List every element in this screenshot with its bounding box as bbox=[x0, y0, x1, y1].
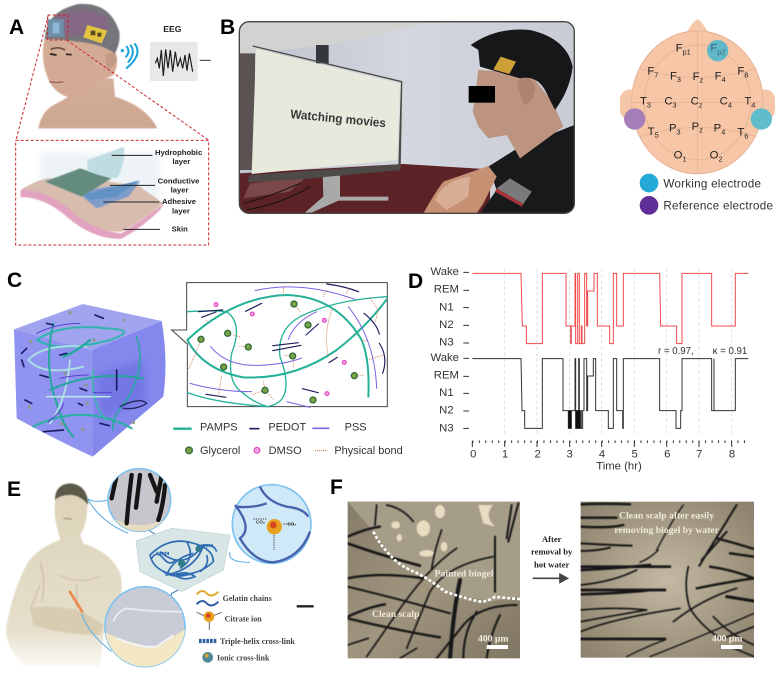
magnifier: citrate ion bbox=[232, 485, 311, 563]
legend: working electrode bbox=[640, 174, 761, 192]
electrode labels: C bbox=[720, 96, 728, 108]
legend: reference electrode: Reference electrode bbox=[663, 199, 773, 212]
electrode labels bbox=[640, 43, 755, 163]
EEG trace box bbox=[150, 42, 211, 81]
x axis title: Time (hr) bbox=[596, 460, 642, 472]
head diagram bbox=[620, 19, 775, 174]
micrograph: painted biogel: Clean scalp bbox=[372, 609, 419, 620]
panel label A: A bbox=[9, 16, 24, 39]
electrode labels: T bbox=[640, 96, 647, 108]
magnified inset bbox=[172, 283, 387, 407]
removal caption bbox=[531, 534, 573, 569]
monitor stand bbox=[304, 173, 388, 213]
subject hair bbox=[471, 29, 573, 110]
y axis labels: upper: N3 bbox=[439, 336, 454, 348]
magnifier: skin interface bbox=[103, 587, 187, 668]
human figure bbox=[6, 483, 122, 667]
electrode labels: 6 bbox=[744, 131, 748, 140]
physical bonds bbox=[187, 286, 383, 399]
electrode labels: F bbox=[670, 70, 677, 82]
black hypnogram bbox=[472, 359, 748, 428]
x axis ticks bbox=[472, 441, 732, 447]
legend: citrate ion bbox=[197, 611, 262, 630]
legend: gelatin chains bbox=[197, 591, 272, 605]
electrode labels: 1 bbox=[682, 154, 687, 163]
electrode labels: O bbox=[710, 150, 718, 162]
layered biogel inset: Conductive bbox=[158, 177, 199, 186]
electrode labels: O bbox=[674, 150, 682, 162]
y axis labels: lower: Wake bbox=[430, 352, 459, 364]
electrode labels: 8 bbox=[744, 70, 748, 79]
electrode labels: p1 bbox=[683, 47, 691, 56]
y axis labels: lower: N2 bbox=[439, 405, 454, 417]
removal caption: removal by bbox=[531, 546, 573, 556]
x axis labels: 1 bbox=[502, 449, 508, 461]
electrode labels: P bbox=[714, 123, 721, 135]
legend: reference electrode bbox=[640, 196, 773, 215]
screen text: Watching movies bbox=[290, 107, 387, 130]
y axis labels: upper bbox=[430, 266, 459, 348]
electrode labels: P bbox=[692, 121, 699, 133]
layered biogel inset: Adhesive bbox=[162, 197, 196, 206]
x axis labels: 6 bbox=[664, 449, 670, 461]
y axis labels: upper: REM bbox=[434, 284, 459, 296]
legend: polymers: PEDOT bbox=[268, 421, 306, 433]
legend: gelatin chains: Gelatin chains bbox=[223, 594, 272, 603]
cube illustration bbox=[14, 304, 165, 457]
legend: molecules and bond: Glycerol bbox=[200, 445, 240, 457]
DMSO molecules bbox=[214, 303, 346, 396]
room background bbox=[239, 22, 574, 213]
y axis labels: upper: N2 bbox=[439, 319, 454, 331]
panel E: biogel on body bbox=[6, 469, 314, 668]
legend: polymers bbox=[173, 421, 367, 433]
zoom callout lines bbox=[16, 15, 208, 140]
y axis labels: lower bbox=[430, 352, 459, 434]
hydrophobic layer bbox=[87, 147, 124, 178]
biogel strip on arm bbox=[69, 591, 83, 612]
electrode labels: 5 bbox=[655, 131, 659, 140]
electrode labels: P bbox=[669, 123, 677, 135]
removal caption: hot water bbox=[534, 559, 569, 569]
y axis labels: upper: Wake bbox=[430, 266, 459, 278]
micrograph: clean scalp bbox=[581, 502, 754, 658]
legend: molecules and bond bbox=[186, 445, 403, 457]
icon: wireless signal bbox=[121, 44, 137, 68]
electrode labels: F bbox=[647, 66, 654, 78]
panel label C: C bbox=[7, 269, 22, 292]
electrode labels: 4 bbox=[728, 100, 732, 109]
electrode labels: z bbox=[700, 76, 704, 85]
adhesive layer bbox=[77, 182, 140, 208]
y axis labels: lower: REM bbox=[434, 369, 459, 381]
panel C: hydrogel network bbox=[14, 283, 403, 457]
subject torso bbox=[480, 125, 574, 213]
panel B: electrode map bbox=[620, 19, 775, 215]
y axis labels: upper: N1 bbox=[439, 301, 454, 313]
magnifier: citrate ion: CO₂ bbox=[256, 520, 265, 525]
x axis labels bbox=[470, 449, 735, 461]
electrode labels: 4 bbox=[722, 75, 726, 84]
panel label D: D bbox=[408, 270, 423, 293]
electrode labels: 4 bbox=[721, 127, 725, 136]
arrow bbox=[533, 574, 567, 582]
x axis labels: 4 bbox=[599, 449, 605, 461]
electrode labels: 7 bbox=[654, 70, 658, 79]
electrode labels: z bbox=[699, 100, 703, 109]
electrode labels: F bbox=[737, 66, 744, 78]
x axis labels: 2 bbox=[535, 449, 541, 461]
callout lines bbox=[82, 498, 250, 652]
PSS chains bbox=[190, 287, 377, 407]
correlation note: r = 0.97, bbox=[658, 346, 694, 357]
electrode markers bbox=[624, 40, 772, 130]
micrograph: clean scalp: removing biogel by water bbox=[614, 525, 720, 536]
EEG heading: EEG bbox=[163, 24, 182, 34]
micrograph: painted biogel: 400 μm bbox=[478, 634, 508, 645]
hydrogel block bbox=[136, 528, 230, 592]
x axis labels: 0 bbox=[470, 449, 476, 461]
legend: working electrode: Working electrode bbox=[663, 177, 761, 190]
electrode labels: p2 bbox=[717, 47, 725, 56]
panel label F: F bbox=[330, 476, 343, 499]
monitor bbox=[248, 46, 402, 182]
layered biogel inset: layer bbox=[172, 206, 190, 215]
conductive layer bbox=[45, 168, 112, 197]
electrode labels: C bbox=[691, 96, 699, 108]
electrode labels: 4 bbox=[751, 100, 755, 109]
y axis ticks bbox=[463, 272, 469, 428]
privacy bar bbox=[469, 86, 495, 103]
x axis labels: 3 bbox=[567, 449, 573, 461]
layered biogel inset bbox=[16, 140, 209, 245]
legend: polymers: PAMPS bbox=[200, 421, 238, 433]
panel F: scalp micrographs bbox=[348, 502, 754, 658]
panel label B: B bbox=[220, 16, 235, 39]
subject neck and face bbox=[473, 70, 563, 158]
electrode labels: 3 bbox=[673, 100, 677, 109]
legend: ionic cross-link bbox=[202, 652, 270, 663]
panel D: sleep staging chart bbox=[430, 266, 748, 472]
biogel boundary bbox=[373, 532, 520, 602]
electrode labels: 3 bbox=[677, 127, 681, 136]
electrode labels: F bbox=[676, 43, 683, 55]
PEDOT chains bbox=[198, 284, 385, 397]
red hypnogram bbox=[472, 273, 748, 344]
micrograph: clean scalp: 400 μm bbox=[712, 634, 742, 645]
micrograph: painted biogel: Painted biogel bbox=[435, 569, 494, 580]
electrode labels: F bbox=[693, 71, 700, 83]
electrode labels: C bbox=[664, 96, 673, 108]
electrode labels: F bbox=[715, 70, 722, 82]
scale dash bbox=[297, 603, 314, 610]
y axis labels: lower: N3 bbox=[439, 422, 454, 434]
legend: triple-helix cross-link: Triple-helix cross-link bbox=[220, 637, 295, 646]
legend: citrate ion: Citrate ion bbox=[225, 615, 262, 624]
layered biogel inset: layer bbox=[172, 157, 190, 166]
glycerol molecules bbox=[198, 301, 357, 403]
layered biogel inset: Hydrophobic bbox=[155, 148, 203, 157]
electrode labels: 3 bbox=[677, 75, 681, 84]
micrograph: painted biogel bbox=[348, 502, 520, 658]
PAMPS chains bbox=[187, 295, 387, 407]
y axis labels: lower: N1 bbox=[439, 387, 454, 399]
magnifier: hair follicles bbox=[107, 469, 173, 535]
electrode labels: T bbox=[737, 127, 744, 139]
panel A: wearable EEG biogel bbox=[16, 4, 211, 245]
removal caption: After bbox=[542, 534, 562, 544]
legend: polymers: PSS bbox=[345, 421, 367, 433]
x axis labels: 8 bbox=[729, 449, 735, 461]
legend: molecules and bond: DMSO bbox=[269, 445, 302, 457]
electrode labels: F bbox=[710, 43, 717, 55]
legend: molecules and bond: Physical bond bbox=[334, 445, 403, 457]
skin layer bbox=[21, 183, 163, 239]
panel B: photo of subject watching movies bbox=[239, 22, 574, 213]
electrode labels: 3 bbox=[647, 100, 651, 109]
legend: ionic cross-link: Ionic cross-link bbox=[217, 654, 270, 663]
subject arm bbox=[423, 166, 497, 213]
kappa note: κ = 0.91 bbox=[713, 346, 747, 357]
magnifier: citrate ion: CO₂ bbox=[287, 522, 296, 527]
x axis labels: 5 bbox=[632, 449, 638, 461]
electrode labels: 2 bbox=[718, 154, 723, 163]
illustration: head with electrodes bbox=[38, 4, 157, 128]
dense N3 segments bbox=[568, 411, 580, 428]
forehead patch bbox=[493, 57, 516, 74]
electrode labels: T bbox=[648, 126, 655, 138]
table bbox=[239, 164, 490, 213]
panel label E: E bbox=[7, 478, 21, 501]
electrode highlight bbox=[48, 15, 68, 40]
x axis labels: 7 bbox=[696, 449, 702, 461]
electrode labels: T bbox=[744, 96, 751, 108]
hour gridlines bbox=[505, 268, 732, 433]
layered biogel inset: layer bbox=[171, 186, 189, 195]
layered biogel inset: Skin bbox=[172, 225, 188, 234]
electrode labels: z bbox=[699, 126, 703, 135]
micrograph: clean scalp: Clean scalp after easily bbox=[619, 511, 714, 522]
